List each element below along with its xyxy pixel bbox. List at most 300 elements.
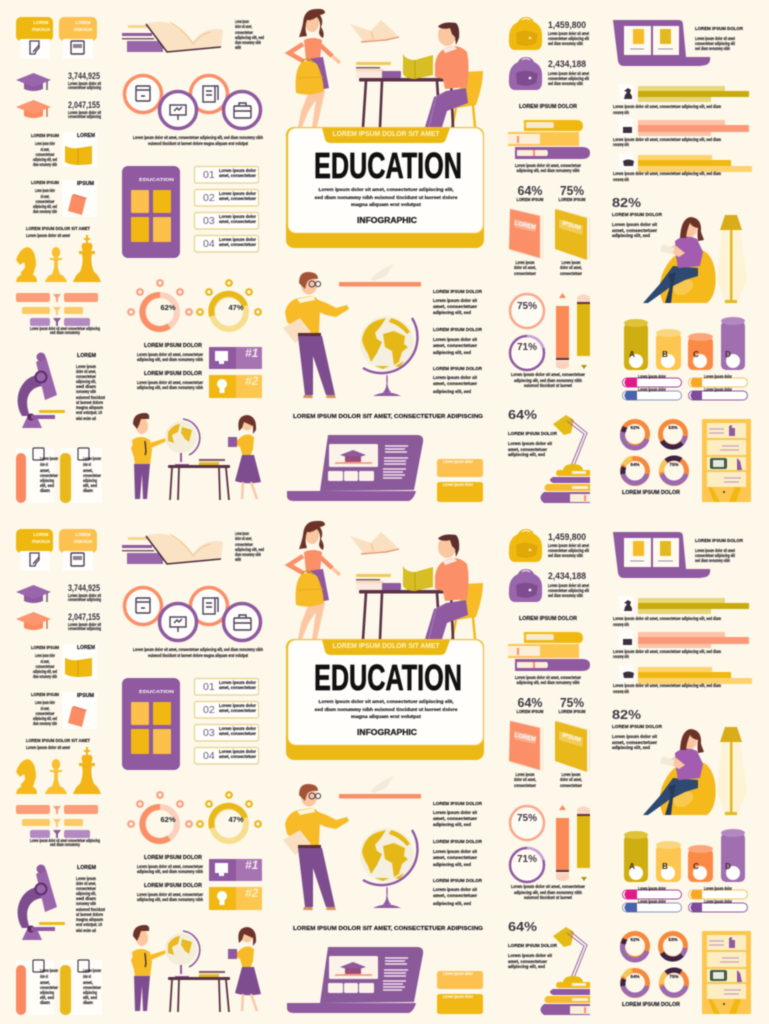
- chart: horizontal bars: nonummy nibh: [613, 654, 629, 659]
- panel: vertical pill notes: dolor sit: [40, 974, 48, 979]
- text block: globe notes: Lorem ipsum dolor sit: [433, 849, 477, 854]
- panel: reader on beanbag with lamp: amet, consectetuer: [612, 740, 657, 745]
- panel: microscope: nonummy nibh: [76, 389, 96, 394]
- text block: globe notes: LOREM IPSUM DOLOR: [433, 839, 483, 844]
- text block: globe notes: LOREM IPSUM DOLOR: [433, 878, 483, 883]
- panel: numbered list: [194, 678, 258, 764]
- panel: lorem and ipsum mini books: Lorem ipsum dolor: [35, 141, 55, 146]
- panel: numbered list: 03: [203, 727, 215, 739]
- panel: lorem and ipsum mini books: [31, 644, 97, 729]
- panel: vertical pill notes: amet,: [40, 468, 50, 473]
- panel: numbered list: 01: [203, 169, 215, 181]
- panel: header tabs with icons: IPSUM DOLOR: [74, 539, 92, 545]
- chart: horizontal bars: nonummy nibh: [613, 110, 629, 115]
- panel: tablet: EDUCATION: [139, 177, 175, 183]
- panel: two buttons: Lorem ipsum dolor: [443, 994, 473, 1000]
- title card: [286, 127, 484, 248]
- panel: laptop with books: LOREM IPSUM DOLOR: [695, 538, 744, 543]
- chart: four small donuts: 62%: [630, 937, 640, 942]
- text block: globe notes: adipiscing elit, sed: [433, 350, 471, 355]
- panel: header tabs with icons: [16, 17, 97, 59]
- panel: lorem and ipsum mini books: adipiscing elit, sed: [33, 204, 57, 209]
- panel: book percentages: 64%: [518, 184, 542, 198]
- panel: graduation cap stats: Lorem ipsum dolor sit: [68, 110, 101, 115]
- title card: EDUCATION: [314, 657, 462, 698]
- panel: book percentages: LOREM IPSUM: [516, 709, 544, 714]
- panel: reader on beanbag with lamp: LOREM IPSUM DOLOR: [612, 212, 663, 217]
- panel: rings and pencils: 71%: [517, 342, 537, 353]
- panel: two buttons: [437, 459, 483, 502]
- heading: centre line: LOREM IPSUM DOLOR SIT AMET, CONSECTETUER ADIPISCING: [293, 414, 483, 420]
- panel: lorem and ipsum mini books: sit amet,: [40, 147, 50, 152]
- title card: Lorem ipsum dolor sit amet, consectetuer adipiscing elit,: [318, 699, 454, 704]
- chart: progress pills: Lorem ipsum dolor: [704, 899, 732, 904]
- panel: graduation cap stats: consectetuer adipiscing: [68, 626, 101, 631]
- panel: microscope: [18, 352, 105, 428]
- title card: sed diam nonummy nibh euismod tincidunt ut laoreet dolore: [314, 195, 458, 200]
- panel: chess pieces: [16, 738, 101, 794]
- panel: backpack stats: consectetuer adipiscing elit: [548, 548, 589, 553]
- illustration: student and reader at table: [289, 521, 483, 639]
- panel: open book: [122, 19, 264, 52]
- panel: header tabs with icons: [16, 529, 97, 571]
- panel: lorem and ipsum mini books: sit amet,: [40, 706, 50, 711]
- panel: book stack: LOREM IPSUM DOLOR: [519, 104, 577, 110]
- panel: book percentages: [509, 696, 590, 788]
- panel: numbered list: 04: [203, 750, 215, 762]
- chart: progress pills: Lorem ipsum dolor: [638, 899, 666, 904]
- panel: numbered badges: adipiscing elit, sed diam nonummy nibh: [137, 357, 203, 362]
- text block: globe notes: LOREM IPSUM DOLOR: [433, 366, 483, 371]
- chart: horizontal bars: Lorem ipsum dolor sit amet, consectetuer adipiscing elit, sed diam: [613, 171, 721, 176]
- panel: open book: diam nonummy nibh: [235, 40, 261, 45]
- panel: reader on beanbag with lamp: 82%: [612, 708, 641, 722]
- panel: lorem and ipsum mini books: Lorem ipsum dolor: [35, 700, 55, 705]
- panel: lorem and ipsum mini books: LOREM IPSUM: [31, 133, 59, 138]
- panel: desk lamp on books: [508, 920, 590, 1015]
- panel: microscope: Lorem ipsum: [76, 876, 96, 881]
- panel: microscope: LOREM: [77, 865, 96, 871]
- text block: globe notes: amet, consectetuer: [433, 304, 477, 309]
- panel: book stack: LOREM IPSUM DOLOR: [519, 616, 577, 622]
- panel: header tabs with icons: LOREM: [76, 20, 90, 26]
- panel: desk lamp on books: [508, 408, 590, 503]
- panel: vertical pill notes: dolor sit: [40, 462, 48, 467]
- panel: vertical pill notes: consectetuer: [40, 473, 58, 478]
- title card: LOREM IPSUM DOLOR SIT AMET: [332, 643, 440, 650]
- panel: microscope: euismod tincidunt: [76, 395, 105, 400]
- panel: rings and pencils: 75%: [517, 813, 537, 824]
- panel: microscope: adipiscing elit,: [76, 379, 96, 384]
- panel: numbered list: Lorem ipsum dolor: [219, 749, 256, 754]
- panel: desk lamp on books: amet, consectetuer: [508, 447, 547, 452]
- panel: open book: [122, 531, 264, 564]
- illustration: laptop with cap: [287, 435, 423, 501]
- panel: book stack: adipiscing elit, sed diam nonummy nibh: [516, 680, 580, 685]
- panel: graduation cap stats: consectetuer adipiscing: [68, 85, 101, 90]
- panel: tablet: [122, 678, 180, 770]
- panel: lorem and ipsum mini books: adipiscing elit, sed: [33, 157, 57, 162]
- panel: numbered badges: adipiscing elit, sed diam nonummy nibh: [137, 897, 203, 902]
- panel: laptop with books: consectetuer adipiscing elit: [695, 41, 735, 46]
- panel: linked ring icons: [124, 76, 263, 146]
- chart: horizontal bars: nonummy nibh: [613, 689, 629, 694]
- panel: lorem and ipsum mini books: sit amet,: [40, 194, 50, 199]
- text block: globe notes: Lorem ipsum dolor sit: [433, 887, 477, 892]
- illustration: bookshelf: [702, 931, 751, 1014]
- panel: tablet: EDUCATION: [139, 689, 175, 695]
- panel: vertical pill notes: Lorem ipsum: [40, 968, 58, 973]
- panel: numbered badges: adipiscing elit, sed diam nonummy nibh: [137, 385, 203, 390]
- chart: horizontal bars: [613, 84, 752, 182]
- chart: percentage donuts: [128, 280, 261, 329]
- panel: lorem and ipsum mini books: diam nonummy nibh: [33, 721, 57, 726]
- panel: book percentages: LOREM: [514, 221, 536, 231]
- panel: open book: dolor sit amet,: [235, 24, 252, 29]
- panel: book percentages: dolor sit amet,: [514, 265, 536, 270]
- chart: progress pills: Lorem ipsum dolor: [638, 886, 666, 891]
- panel: numbered list: Lorem ipsum dolor: [219, 191, 256, 196]
- panel: book stack: Lorem ipsum dolor sit amet, consectetuer: [515, 675, 581, 680]
- chart: cylinders: C: [693, 862, 699, 871]
- panel: backpack stats: sed diam nonummy nibh: [548, 553, 583, 558]
- panel: numbered list: Lorem ipsum dolor: [219, 168, 256, 173]
- panel: numbered badges: Lorem ipsum dolor sit amet, consectetuer: [137, 864, 203, 869]
- panel: numbered badges: #1: [245, 858, 259, 872]
- panel: laptop with books: sed diam nonummy nibh: [695, 558, 730, 563]
- panel: lorem and ipsum mini books: diam nonummy nibh: [33, 162, 57, 167]
- panel: numbered list: 03: [203, 215, 215, 227]
- title card: Lorem ipsum dolor sit amet, consectetuer adipiscing elit,: [318, 187, 454, 192]
- panel: laptop with books: consectetuer adipiscing elit: [695, 553, 735, 558]
- panel: vertical pill notes: [16, 448, 102, 503]
- panel: vertical pill notes: Lorem ipsum: [40, 456, 58, 461]
- chart: percentage donuts: 47%: [228, 303, 244, 312]
- panel: graduation cap stats: 3,744,925: [68, 583, 101, 594]
- panel: reader on beanbag with lamp: LOREM IPSUM DOLOR: [612, 724, 663, 729]
- panel: numbered badges: adipiscing elit, sed diam nonummy nibh: [137, 869, 203, 874]
- panel: numbered list: amet, consectetuer: [219, 196, 256, 201]
- chart: cylinders: [624, 317, 745, 370]
- panel: open book: diam nonummy nibh: [235, 552, 261, 557]
- panel: book stack: [508, 616, 590, 685]
- panel: vertical pill notes: adipiscing: [40, 478, 54, 483]
- illustration: bookshelf: [702, 419, 751, 502]
- panel: numbered badges: #2: [245, 374, 259, 388]
- panel: rings and pencils: euismod tincidunt ut laoreet: [524, 895, 572, 900]
- panel: book percentages: [509, 184, 590, 276]
- chart: four small donuts: [622, 422, 686, 496]
- heading: centre line: LOREM IPSUM DOLOR SIT AMET, CONSECTETUER ADIPISCING: [293, 926, 483, 932]
- panel: backpack stats: consectetuer adipiscing elit: [548, 76, 589, 81]
- chart: percentage donuts: 62%: [160, 815, 176, 824]
- chart: progress pills: Lorem ipsum dolor: [704, 387, 732, 392]
- panel: microscope: wisi enim ad: [75, 416, 96, 421]
- title card: INFOGRAPHIC: [357, 728, 417, 737]
- panel: vertical pill notes: amet,: [40, 980, 50, 985]
- panel: microscope: dolor sit amet,: [76, 369, 96, 374]
- panel: graduation cap stats: 3,744,925: [68, 71, 101, 82]
- panel: backpack stats: Lorem ipsum dolor sit amet: [548, 31, 589, 36]
- panel: open book: adipiscing elit, sed: [235, 35, 264, 40]
- panel: open book: elit: [235, 557, 241, 562]
- illustration: laptop with cap: [287, 947, 423, 1013]
- chart: cylinders: B: [662, 862, 668, 871]
- chart: percentage donuts: 62%: [160, 303, 176, 312]
- chart: cylinders: A: [629, 862, 635, 871]
- illustration: teacher with glasses: [283, 264, 421, 398]
- panel: open book: elit: [235, 45, 241, 50]
- text block: globe notes: Lorem ipsum dolor sit: [433, 810, 477, 815]
- panel: chess pieces: Lorem ipsum dolor sit amet: [26, 745, 70, 750]
- panel: lorem and ipsum mini books: LOREM IPSUM: [31, 692, 59, 697]
- panel: microscope: adipiscing elit,: [76, 891, 96, 896]
- text block: globe notes: amet, consectetuer: [433, 816, 477, 821]
- panel: header tabs with icons: LOREM: [34, 20, 48, 26]
- panel: open book: dolor sit amet,: [235, 536, 252, 541]
- panel: chess pieces: LOREM IPSUM DOLOR SIT AMET: [26, 738, 90, 743]
- chart: cylinders: C: [693, 350, 699, 359]
- panel: reader on beanbag with lamp: Lorem ipsum dolor sit: [612, 734, 657, 739]
- panel: microscope: nonummy nibh: [76, 901, 96, 906]
- panel: vertical pill notes: adipiscing: [83, 990, 97, 995]
- infographic copy: top: [16, 9, 752, 503]
- panel: book stack: adipiscing elit, sed diam nonummy nibh: [516, 168, 580, 173]
- panel: backpack stats: consectetuer adipiscing elit: [548, 36, 589, 41]
- text block: globe notes: Lorem ipsum dolor sit: [433, 337, 477, 342]
- panel: graduation cap stats: consectetuer adipiscing: [68, 114, 101, 119]
- panel: open book: Lorem ipsum: [235, 531, 249, 536]
- panel: reader on beanbag with lamp: 82%: [612, 196, 641, 210]
- chart: horizontal bars: nonummy nibh: [613, 622, 629, 627]
- panel: desk lamp on books: adipiscing elit, sed: [508, 452, 545, 457]
- panel: chess pieces: [16, 226, 101, 282]
- panel: graduation cap stats: [16, 583, 101, 631]
- panel: numbered list: Lorem ipsum dolor: [219, 237, 256, 242]
- panel: numbered badges: LOREM IPSUM DOLOR: [144, 371, 202, 377]
- panel: backpack stats: sed diam nonummy nibh: [548, 81, 583, 86]
- panel: rings and pencils: euismod tincidunt ut laoreet: [524, 383, 572, 388]
- panel: graduation cap stats: [16, 71, 101, 119]
- panel: vertical pill notes: diam: [83, 488, 93, 493]
- panel: backpack stats: 2,434,188: [548, 571, 586, 582]
- panel: microscope: Lorem ipsum: [76, 364, 96, 369]
- chart: progress pills: Lorem ipsum dolor: [638, 374, 666, 379]
- title card: sed diam nonummy nibh euismod tincidunt ut laoreet dolore: [314, 707, 458, 712]
- panel: laptop with books: [613, 532, 744, 578]
- text block: globe notes: adipiscing elit, sed: [433, 862, 471, 867]
- panel: backpack stats: Lorem ipsum dolor sit amet: [548, 71, 589, 76]
- panel: funnel bars: Lorem ipsum dolor sit amet consectetuer adipiscing: [30, 326, 100, 331]
- panel: graduation cap stats: 2,047,155: [68, 612, 101, 623]
- panel: graduation cap stats: Lorem ipsum dolor sit: [68, 593, 101, 598]
- chart: cylinders: D: [725, 862, 731, 871]
- panel: rings and pencils: 75%: [517, 301, 537, 312]
- panel: header tabs with icons: IPSUM DOLOR: [32, 27, 50, 33]
- panel: reader on beanbag with lamp: amet, consectetuer: [612, 228, 657, 233]
- panel: vertical pill notes: adipiscing: [83, 478, 97, 483]
- chart: cylinders: D: [725, 350, 731, 359]
- panel: book percentages: LOREM IPSUM: [558, 197, 586, 202]
- chart: percentage donuts: 47%: [228, 815, 244, 824]
- panel: laptop with books: Lorem ipsum dolor sit amet: [695, 548, 735, 553]
- panel: numbered list: Lorem ipsum dolor: [219, 214, 256, 219]
- panel: lorem and ipsum mini books: adipiscing elit, sed: [33, 669, 57, 674]
- panel: lorem and ipsum mini books: adipiscing elit, sed: [33, 716, 57, 721]
- panel: vertical pill notes: diam: [83, 1000, 93, 1005]
- text block: globe notes: [433, 801, 483, 906]
- chart: four small donuts: 75%: [669, 462, 679, 467]
- panel: linked ring icons: Lorem ipsum dolor sit amet, consectetuer adipiscing elit, sed diam nonummy nibh: [133, 135, 263, 140]
- panel: numbered list: 04: [203, 238, 215, 250]
- chart: cylinders: [624, 829, 745, 882]
- chart: progress pills: Lorem ipsum dolor: [704, 374, 732, 379]
- panel: open book: consectetuer: [235, 30, 253, 35]
- chart: four small donuts: 62%: [630, 425, 640, 430]
- panel: numbered list: Lorem ipsum dolor: [219, 680, 256, 685]
- title card: INFOGRAPHIC: [357, 216, 417, 225]
- panel: graduation cap stats: 2,047,155: [68, 100, 101, 111]
- panel: two buttons: Lorem ipsum dolor: [443, 482, 473, 488]
- panel: numbered list: Lorem ipsum dolor: [219, 726, 256, 731]
- panel: book percentages: 75%: [560, 184, 584, 198]
- panel: numbered list: 02: [203, 192, 215, 204]
- panel: backpack stats: 1,459,800: [548, 532, 586, 543]
- chart: four small donuts: 64%: [630, 462, 640, 467]
- panel: numbered badges: Lorem ipsum dolor sit amet, consectetuer: [137, 380, 203, 385]
- panel: numbered badges: #2: [245, 886, 259, 900]
- panel: graduation cap stats: consectetuer adipiscing: [68, 597, 101, 602]
- panel: book percentages: 75%: [560, 696, 584, 710]
- panel: numbered list: Lorem ipsum dolor: [219, 703, 256, 708]
- panel: book stack: [508, 104, 590, 173]
- panel: book percentages: consectetuer: [560, 271, 582, 276]
- text block: globe notes: amet, consectetuer: [433, 343, 477, 348]
- panel: lorem and ipsum mini books: consectetuer: [36, 664, 55, 669]
- illustration: teacher with glasses: [283, 776, 421, 910]
- panel: book percentages: consectetuer: [514, 271, 536, 276]
- panel: vertical pill notes: amet,: [83, 980, 93, 985]
- text block: globe notes: amet, consectetuer: [433, 893, 477, 898]
- panel: numbered list: amet, consectetuer: [219, 219, 256, 224]
- panel: book percentages: consectetuer: [514, 783, 536, 788]
- panel: microscope: LOREM: [77, 353, 96, 359]
- chart: four small donuts: 64%: [630, 974, 640, 979]
- panel: lorem and ipsum mini books: sit amet,: [40, 659, 50, 664]
- panel: book percentages: 64%: [518, 696, 542, 710]
- panel: lorem and ipsum mini books: LOREM IPSUM: [31, 180, 59, 185]
- panel: linked ring icons: Lorem ipsum dolor sit amet, consectetuer adipiscing elit, sed diam nonummy nibh: [133, 647, 263, 652]
- panel: funnel bars: [16, 293, 100, 335]
- chart: horizontal bars: Lorem ipsum dolor sit amet, consectetuer adipiscing elit, sed diam: [613, 683, 721, 688]
- title card: EDUCATION: [314, 145, 462, 186]
- panel: book percentages: dolor sit amet,: [560, 265, 582, 270]
- panel: chess pieces: LOREM IPSUM DOLOR SIT AMET: [26, 226, 90, 231]
- panel: lorem and ipsum mini books: IPSUM: [77, 693, 94, 699]
- panel: lorem and ipsum mini books: consectetuer: [36, 711, 55, 716]
- panel: header tabs with icons: IPSUM DOLOR: [74, 27, 92, 33]
- panel: lorem and ipsum mini books: consectetuer: [36, 199, 55, 204]
- panel: microscope: ut laoreet dolore: [76, 912, 103, 917]
- chart: horizontal bars: nonummy nibh: [613, 142, 629, 147]
- panel: book percentages: consectetuer: [560, 783, 582, 788]
- text block: globe notes: amet, consectetuer: [433, 381, 477, 386]
- chart: progress pills: Lorem ipsum dolor: [704, 886, 732, 891]
- panel: vertical pill notes: dolor sit: [83, 974, 91, 979]
- text block: globe notes: Lorem ipsum dolor sit: [433, 298, 477, 303]
- panel: numbered badges: LOREM IPSUM DOLOR: [144, 855, 202, 861]
- panel: funnel bars: sed diam nonummy: [50, 330, 80, 335]
- panel: backpack stats: Lorem ipsum dolor sit amet: [548, 583, 589, 588]
- panel: numbered badges: Lorem ipsum dolor sit amet, consectetuer: [137, 352, 203, 357]
- panel: laptop with books: LOREM IPSUM DOLOR: [695, 26, 744, 31]
- panel: numbered list: amet, consectetuer: [219, 242, 256, 247]
- text block: globe notes: adipiscing elit, sed: [433, 822, 471, 827]
- panel: linked ring icons: euismod tincidunt ut laoreet dolore magna aliquam erat volutpat: [148, 653, 248, 658]
- illustration: globe: [360, 316, 417, 396]
- panel: funnel bars: [16, 805, 100, 847]
- panel: backpack stats: 2,434,188: [548, 59, 586, 70]
- panel: vertical pill notes: [16, 960, 102, 1015]
- panel: rings and pencils: [510, 805, 590, 900]
- panel: book percentages: dolor sit amet,: [560, 777, 582, 782]
- panel: backpack stats: sed diam nonummy nibh: [548, 41, 583, 46]
- chart: horizontal bars: Lorem ipsum dolor sit amet, consectetuer adipiscing elit, sed diam: [613, 616, 721, 621]
- panel: header tabs with icons: LOREM: [76, 532, 90, 538]
- chart: horizontal bars: Lorem ipsum dolor sit amet, consectetuer adipiscing elit, sed diam: [613, 137, 721, 142]
- panel: laptop with books: [613, 20, 744, 66]
- panel: vertical pill notes: amet,: [83, 468, 93, 473]
- infographic copy: bottom: [16, 521, 752, 1015]
- text block: globe notes: adipiscing elit, sed: [433, 901, 471, 906]
- illustration: student and reader at table: [289, 9, 483, 127]
- chart: progress pills: [622, 374, 748, 400]
- chart: progress pills: [622, 886, 748, 912]
- title card: magna aliquam erat volutpat: [351, 714, 422, 719]
- panel: rings and pencils: Lorem ipsum dolor sit amet, consectetuer: [511, 884, 585, 889]
- panel: rings and pencils: [510, 293, 590, 388]
- panel: tablet: [122, 166, 180, 258]
- panel: book percentages: IPSUM: [561, 221, 581, 232]
- panel: linked ring icons: [124, 588, 263, 658]
- panel: microscope: consectetuer: [76, 374, 96, 379]
- panel: lorem and ipsum mini books: [31, 132, 97, 217]
- panel: funnel bars: Lorem ipsum dolor sit amet consectetuer adipiscing: [30, 838, 100, 843]
- panel: backpack stats: [509, 17, 589, 90]
- title card: magna aliquam erat volutpat: [351, 202, 422, 207]
- panel: backpack stats: consectetuer adipiscing elit: [548, 588, 589, 593]
- panel: desk lamp on books: amet, consectetuer: [508, 959, 547, 964]
- panel: lorem and ipsum mini books: diam nonummy nibh: [33, 209, 57, 214]
- panel: book percentages: LOREM IPSUM: [558, 709, 586, 714]
- panel: vertical pill notes: elit, sed: [83, 483, 97, 488]
- panel: vertical pill notes: diam: [40, 1000, 50, 1005]
- panel: microscope: magna aliquam: [76, 405, 103, 410]
- chart: four small donuts: LOREM IPSUM DOLOR: [622, 1002, 680, 1008]
- panel: microscope: [18, 864, 105, 940]
- panel: reader on beanbag with lamp: adipiscing elit, sed: [612, 233, 650, 238]
- panel: lorem and ipsum mini books: IPSUM: [77, 181, 94, 187]
- panel: graduation cap stats: Lorem ipsum dolor sit: [68, 81, 101, 86]
- panel: microscope: wisi enim ad: [75, 928, 96, 933]
- panel: microscope: sed diam: [76, 896, 96, 901]
- panel: book percentages: LOREM IPSUM: [516, 197, 544, 202]
- panel: desk lamp on books: LOREM IPSUM DOLOR: [508, 431, 558, 436]
- panel: numbered badges: #1: [245, 346, 259, 360]
- panel: numbered list: amet, consectetuer: [219, 708, 256, 713]
- chart: cylinders: A: [629, 350, 635, 359]
- panel: vertical pill notes: elit, sed: [40, 995, 54, 1000]
